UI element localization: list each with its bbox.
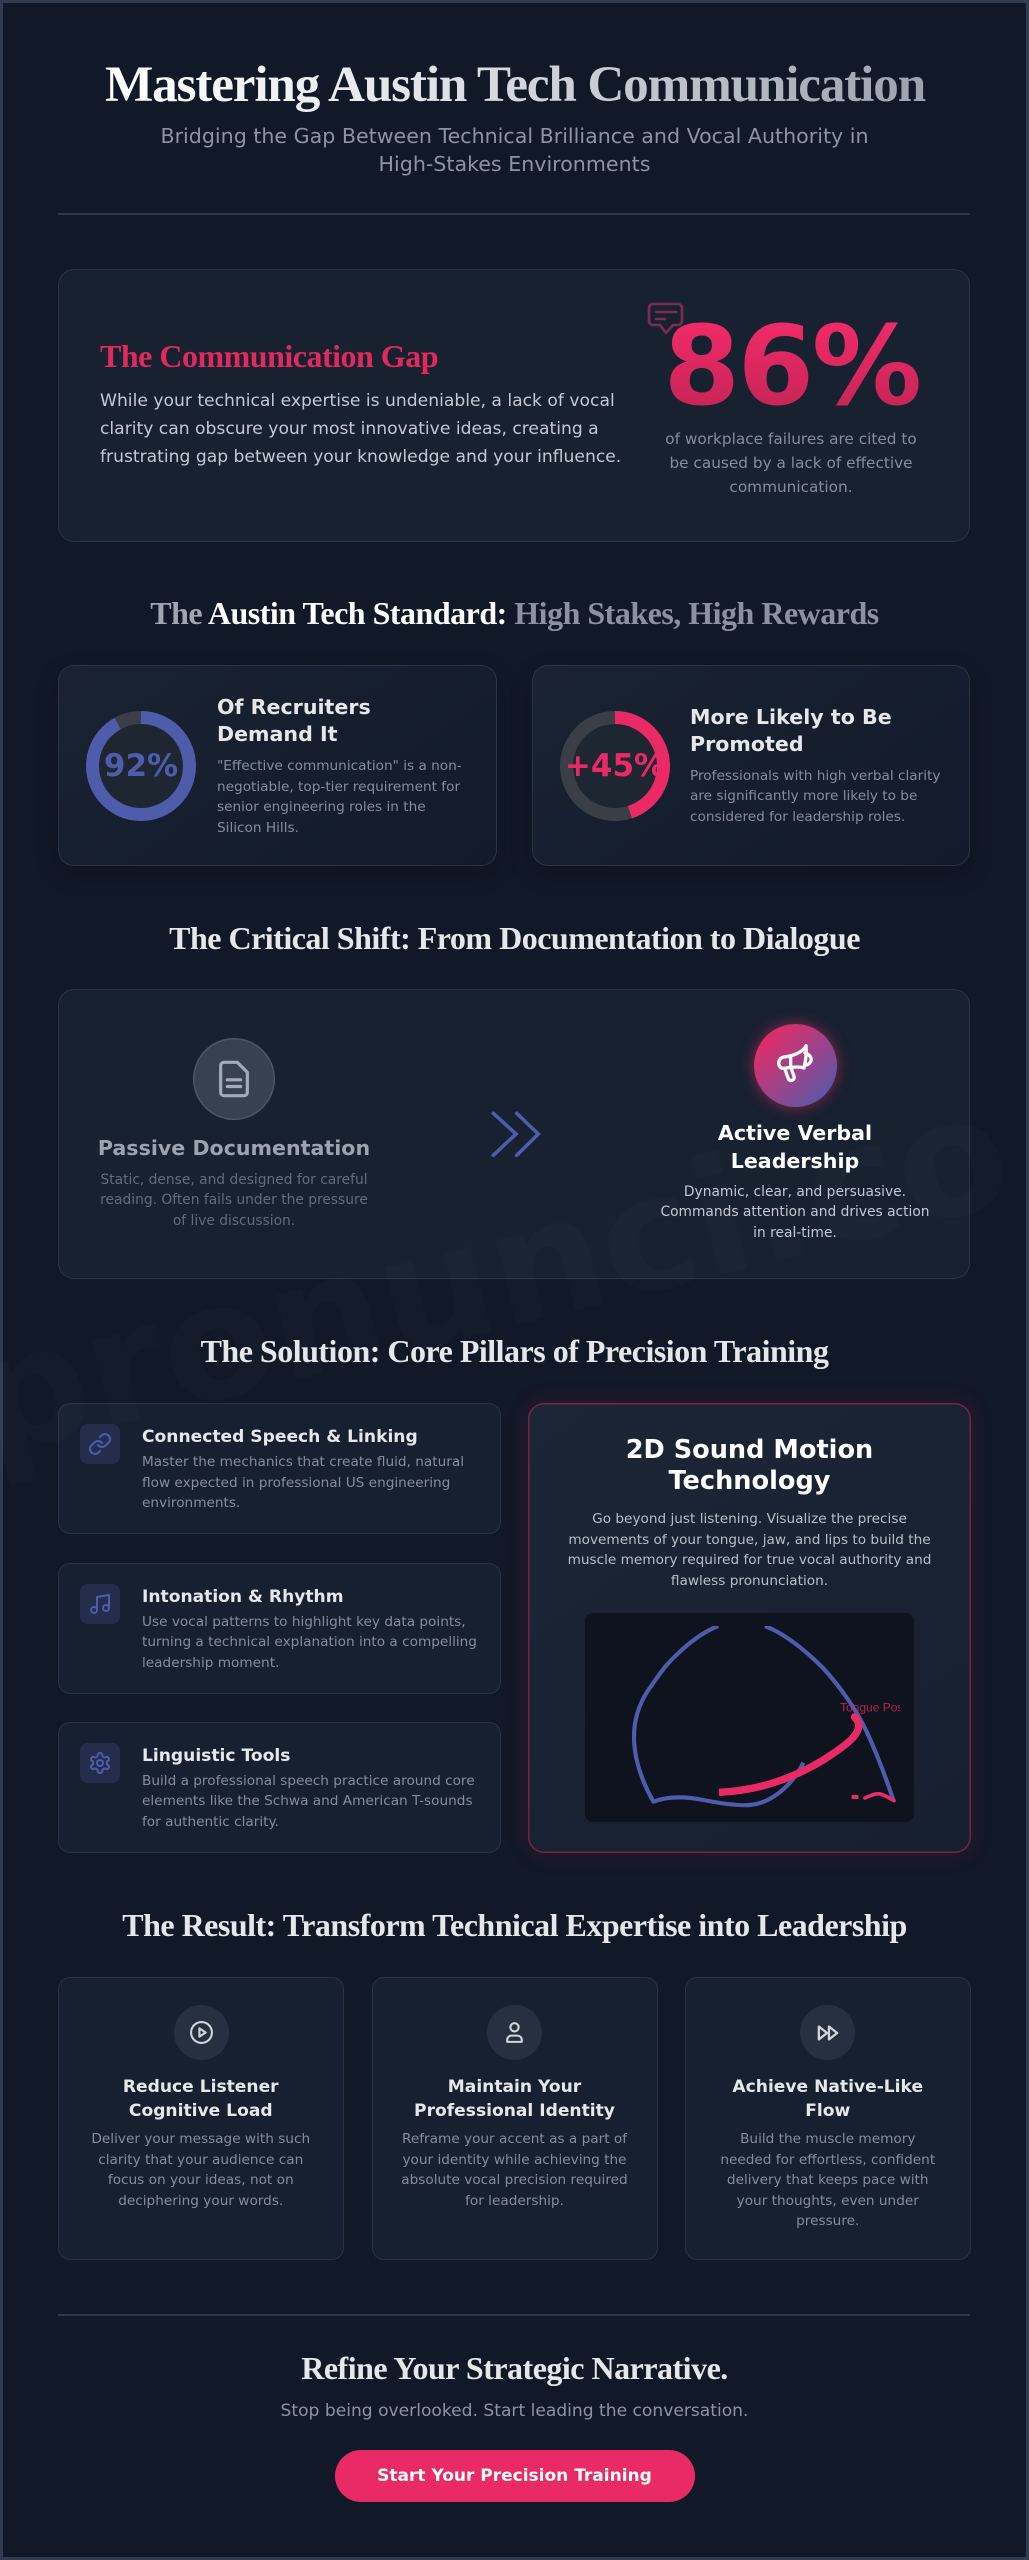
feature text: flawless pronunciation. xyxy=(671,1573,828,1589)
result text: cognitive load: clarity that your audience can xyxy=(98,2152,303,2168)
pillar text: intonation: leadership moment. xyxy=(142,1655,279,1671)
card text: recruiters: senior engineering roles in the xyxy=(217,799,426,815)
text: active verbal leadership: Commands attention and drives action xyxy=(660,1204,930,1220)
result text: cognitive load: Deliver your message with such xyxy=(91,2131,310,2147)
card text: promotion: Professionals with high verbal clarity xyxy=(690,768,940,784)
footer text: Stop being overlooked. Start leading the conversation. xyxy=(281,2401,748,2421)
pillar text: connected speech: flow expected in professional US engineering xyxy=(142,1475,450,1491)
donut chart: 92 percent: 92% xyxy=(104,748,178,784)
icon: user xyxy=(487,2005,542,2060)
pillar text: linguistic tools: Build a professional speech practice around core xyxy=(142,1772,475,1788)
paragraph: gap description xyxy=(100,391,621,467)
result text: cognitive load: focus on your ideas, not on xyxy=(108,2172,294,2188)
panel: maintain professional identity xyxy=(372,1977,658,2260)
feature title: 2D Sound Motion xyxy=(626,1434,873,1464)
subtitle: High-Stakes Environments xyxy=(379,152,650,176)
text: passive documentation: Static, dense, and designed for careful xyxy=(100,1172,368,1188)
text: active verbal leadership: in real-time. xyxy=(753,1225,837,1241)
icon: play circle xyxy=(174,2005,228,2060)
card title: recruiters: Of Recruiters xyxy=(217,695,371,719)
card text: recruiters xyxy=(217,758,462,836)
footer heading: Refine Your Strategic Narrative. xyxy=(301,2350,728,2386)
result text: native-like flow: Build the muscle memory xyxy=(740,2131,915,2147)
result title: professional identity xyxy=(414,2077,615,2121)
heading: the communication gap: The Communication Gap xyxy=(100,338,438,374)
text: passive documentation: reading. Often fails under the pressure xyxy=(100,1192,368,1208)
card title: promotion: Promoted xyxy=(690,732,804,756)
feature text xyxy=(568,1511,931,1589)
stat caption: of workplace failures are cited to xyxy=(665,430,917,448)
result title: professional identity: Maintain Your xyxy=(448,2077,581,2097)
card title: promotion xyxy=(690,705,892,756)
heading: the solution: The Solution: Core Pillars of Precision Training xyxy=(201,1333,828,1369)
donut chart: 92 percent xyxy=(86,711,196,821)
panel: native-like flow xyxy=(685,1977,970,2260)
header xyxy=(58,56,970,215)
heading: the result: The Result: Transform Technical Expertise into Leadership xyxy=(122,1907,907,1943)
label: active verbal leadership: Active Verbal xyxy=(718,1121,872,1145)
panel: intonation pillar xyxy=(58,1562,501,1694)
text: active verbal leadership xyxy=(660,1184,930,1241)
footer divider xyxy=(58,2314,970,2316)
donut chart: plus 45 percent: +45% xyxy=(565,748,665,784)
heading: the austin tech standard: The Austin Tech Standard: High Stakes, High Rewards xyxy=(150,595,879,631)
pillar title: connected speech: Connected Speech & Linking xyxy=(142,1427,418,1447)
pillar text: connected speech: environments. xyxy=(142,1495,240,1511)
panel: linguistic tools pillar xyxy=(58,1722,501,1852)
paragraph: gap description: clarity can obscure your most innovative ideas, creating a xyxy=(100,419,599,439)
label: passive documentation: Passive Documentation xyxy=(98,1136,370,1160)
result title: native-like flow: Achieve Native-Like xyxy=(732,2077,923,2097)
result text: native-like flow: delivery that keeps pace with xyxy=(727,2172,929,2188)
big stat: 86 percent xyxy=(592,310,992,422)
icon: link xyxy=(80,1424,120,1464)
card title: recruiters: Demand It xyxy=(217,722,338,746)
subtitle: Bridging the Gap Between Technical Brilliance and Vocal Authority in xyxy=(160,124,869,148)
big stat: 86 percent: 86% xyxy=(663,302,920,430)
pillar title: linguistic tools: Linguistic Tools xyxy=(142,1746,290,1766)
pillar text: connected speech: Master the mechanics that create fluid, natural xyxy=(142,1454,464,1470)
feature text: movements of your tongue, jaw, and lips to build the xyxy=(568,1532,931,1548)
result title: cognitive load xyxy=(123,2077,279,2121)
stat caption: be caused by a lack of effective xyxy=(669,454,913,472)
subtitle xyxy=(160,124,869,176)
stat caption: communication. xyxy=(729,478,853,496)
button: start training: Start Your Precision Training xyxy=(377,2466,652,2486)
icon: chat message xyxy=(648,302,684,334)
text: passive documentation: of live discussion. xyxy=(173,1213,295,1229)
pillar text: linguistic tools: for authentic clarity. xyxy=(142,1814,279,1830)
header divider xyxy=(58,212,970,214)
card text: promotion xyxy=(690,768,940,825)
result text: professional identity: absolute vocal precision required xyxy=(401,2172,628,2188)
heading: the critical shift: The Critical Shift: From Documentation to Dialogue xyxy=(169,920,860,956)
card title: recruiters xyxy=(217,695,371,746)
pillar title: intonation: Intonation & Rhythm xyxy=(142,1586,344,1606)
pillar text: linguistic tools xyxy=(142,1772,475,1830)
panel: critical shift comparison xyxy=(58,989,970,1279)
text: active verbal leadership: Dynamic, clear, and persuasive. xyxy=(684,1184,906,1200)
pillar text: intonation: turning a technical explanation into a compelling xyxy=(142,1634,477,1650)
donut chart: plus 45 percent xyxy=(560,711,670,821)
icon: music xyxy=(80,1584,120,1624)
result text: cognitive load: deciphering your words. xyxy=(118,2193,283,2209)
panel: 2D sound motion technology xyxy=(528,1403,971,1853)
chart: mouth cross-section diagram: Tongue Position xyxy=(840,1700,925,1714)
stat caption xyxy=(665,430,917,496)
card title: promotion: More Likely to Be xyxy=(690,705,892,729)
text: passive documentation xyxy=(100,1172,368,1229)
icon: fast forward xyxy=(800,2005,855,2060)
panel: promotion stat card xyxy=(532,665,970,866)
button: start training xyxy=(334,2450,694,2502)
result text: professional identity xyxy=(401,2131,628,2209)
feature title: Technology xyxy=(668,1466,830,1496)
card text: recruiters: Silicon Hills. xyxy=(217,820,299,836)
result text: native-like flow: your thoughts, even under xyxy=(737,2193,919,2209)
result title: professional identity: Professional Identity xyxy=(414,2101,615,2121)
panel: recruiters stat card xyxy=(58,665,497,866)
result text: professional identity: for leadership. xyxy=(465,2193,564,2209)
footer call to action xyxy=(58,2314,970,2502)
feature title xyxy=(626,1434,873,1496)
paragraph: gap description: While your technical expertise is undeniable, a lack of vocal xyxy=(100,391,615,411)
pillar text: intonation: Use vocal patterns to highlight key data points, xyxy=(142,1614,466,1630)
result title: cognitive load: Cognitive Load xyxy=(129,2101,273,2121)
card text: recruiters: negotiable, top-tier requirement for xyxy=(217,779,460,795)
result title: cognitive load: Reduce Listener xyxy=(123,2077,279,2097)
pillar text: linguistic tools: elements like the Schwa and American T-sounds xyxy=(142,1793,473,1809)
card text: promotion: considered for leadership roles. xyxy=(690,809,905,825)
result title: native-like flow xyxy=(732,2077,923,2121)
result text: native-like flow: needed for effortless, confident xyxy=(720,2152,935,2168)
result text: professional identity: your identity while achieving the xyxy=(402,2152,627,2168)
result text: cognitive load xyxy=(91,2131,310,2209)
icon: document xyxy=(193,1038,275,1120)
title: Mastering Austin Tech Communication xyxy=(105,56,925,113)
label: active verbal leadership: Leadership xyxy=(731,1148,859,1172)
card text: promotion: are significantly more likely to be xyxy=(690,788,917,804)
icon: megaphone xyxy=(754,1024,837,1107)
result text: professional identity: Reframe your accent as a part of xyxy=(402,2131,627,2147)
card text: recruiters: "Effective communication" is a non- xyxy=(217,758,462,774)
panel: the communication gap xyxy=(58,269,970,542)
chart: mouth cross-section diagram xyxy=(585,1613,914,1822)
result title: native-like flow: Flow xyxy=(805,2101,850,2121)
panel: reduce listener cognitive load xyxy=(58,1977,344,2260)
pillar text: intonation xyxy=(142,1614,477,1671)
arrow: double chevron xyxy=(491,1111,541,1158)
result text: native-like flow: pressure. xyxy=(796,2213,859,2229)
feature text: muscle memory required for true vocal authority and xyxy=(568,1552,931,1568)
result text: native-like flow xyxy=(720,2131,935,2229)
pillar text: connected speech xyxy=(142,1454,464,1511)
icon: settings gear xyxy=(80,1742,120,1782)
paragraph: gap description: frustrating gap between your knowledge and your influence. xyxy=(100,447,621,467)
feature text: Go beyond just listening. Visualize the precise xyxy=(592,1511,907,1527)
panel: connected speech pillar xyxy=(58,1403,501,1534)
label: active verbal leadership xyxy=(718,1121,872,1172)
